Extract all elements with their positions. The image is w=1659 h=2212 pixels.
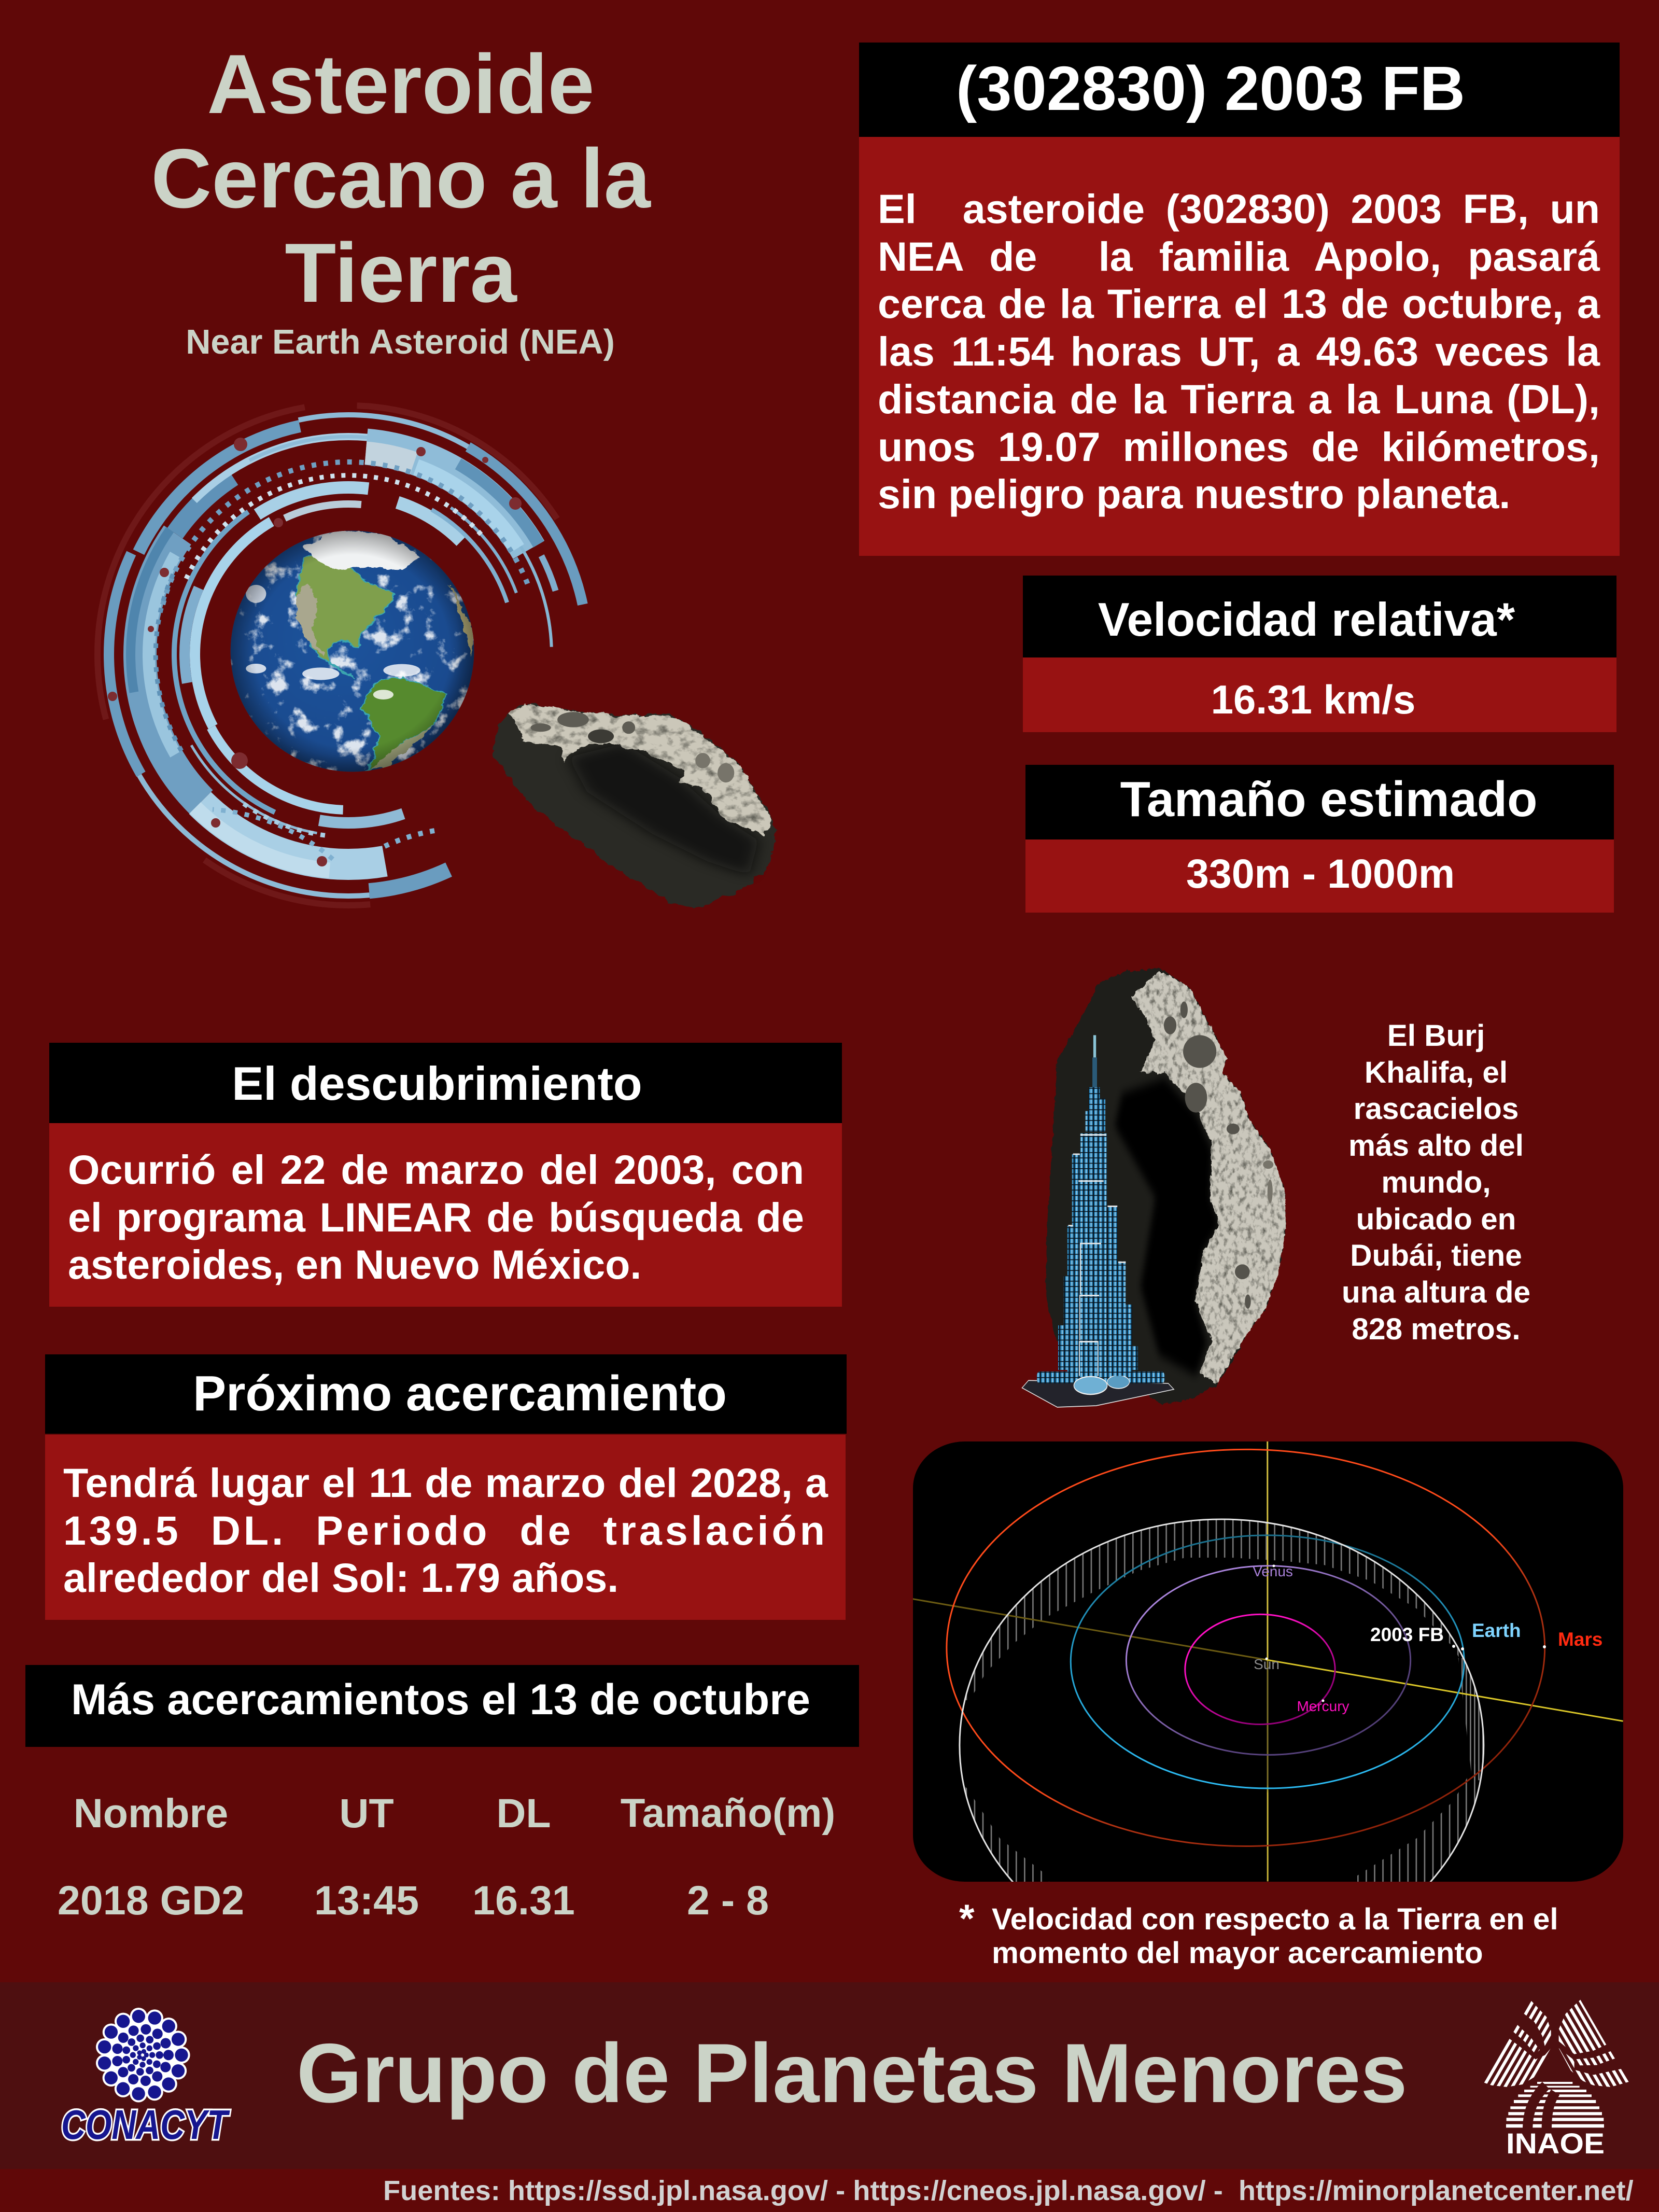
text: next approach: alrededor del Sol: 1.79 años. [63,1555,618,1601]
text: Burj Khalifa note: mundo, [1381,1166,1491,1199]
heading: next approach: Próximo acercamiento [193,1366,727,1421]
panel: description [859,137,1620,556]
icon: earth [231,530,474,772]
table: approaches: UT [339,1790,394,1836]
asteroid [492,703,777,908]
heading: group name: Grupo de Planetas Menores [297,2026,1408,2120]
text: next approach: 139.5 DL. Periodo de traslación [63,1507,828,1553]
heading: more approaches: Más acercamientos el 13 de octubre [71,1675,810,1724]
heading: asteroid name: (302830) 2003 FB [956,53,1465,123]
table: approaches: 2 - 8 [687,1877,769,1923]
panel: discovery [49,1123,842,1307]
orbit labels [1253,1563,1602,1714]
orbit labels: Mars [1558,1629,1602,1650]
illustration: earth with tech rings and asteroid [94,402,778,908]
footer band [0,1982,1659,2169]
text: discovery: asteroides, en Nuevo México. [68,1241,641,1287]
footnote: Velocidad con respecto a la Tierra en el momento del mayor acercamiento [992,1902,1558,1970]
table: approaches: DL [496,1790,551,1836]
tech rings [97,403,599,905]
header: asteroid name [859,43,1620,137]
chart: orbit diagram [913,1441,1623,1882]
text: next approach [63,1460,828,1601]
orbit labels: 2003 FB [1370,1624,1444,1645]
velocity value: 16.31 km/s [1211,677,1415,722]
title: Tierra [285,226,517,320]
orbit labels: Earth [1472,1620,1521,1641]
logo: INAOE [1484,1999,1629,2160]
table: approaches: 13:45 [314,1877,419,1923]
text: description: El asteroide (302830) 2003 FB, un [878,186,1600,232]
text: discovery: Ocurrió el 22 de marzo del 2003, con [68,1146,804,1193]
text: description: cerca de la Tierra el 13 de octubre, a [878,281,1600,327]
panel: next approach header [45,1354,847,1434]
panel: discovery header [49,1043,842,1123]
text: Burj Khalifa note: Khalifa, el [1365,1056,1508,1089]
title: Asteroide [207,37,595,131]
hatching [965,1520,1483,1882]
table: approaches: 16.31 [472,1877,575,1923]
panel: velocity header [1023,576,1616,657]
orbit labels: Mercury [1297,1698,1349,1714]
text: Burj Khalifa note [1342,1019,1530,1346]
text: description: distancia de la Tierra a la Luna (DL), [878,376,1600,422]
text: Burj Khalifa note: más alto del [1348,1129,1524,1163]
text: Burj Khalifa note: 828 metros. [1352,1312,1521,1346]
table: approaches: Nombre [74,1790,228,1836]
text: description: unos 19.07 millones de kilómetros, [878,424,1600,470]
table: approaches: 2018 GD2 [58,1877,244,1923]
panel: size value [1025,839,1614,913]
panel: size header [1025,765,1614,839]
text: description [878,186,1600,517]
table: approaches [58,1790,835,1923]
table: approaches: Tamaño(m) [621,1790,835,1836]
title: Cercano a la [151,132,651,226]
text: description: sin peligro para nuestro planeta. [878,471,1510,517]
big asteroid [1046,968,1286,1404]
heading: discovery: El descubrimiento [232,1057,642,1110]
text: description: NEA de la familia Apolo, pasará [878,233,1600,279]
title [151,37,651,320]
orbit labels: Venus [1253,1563,1293,1579]
heading: size: Tamaño estimado [1120,772,1537,827]
panel: more approaches header [25,1665,859,1747]
panel: velocity value [1023,657,1616,732]
heading: velocity: Velocidad relativa* [1098,594,1515,646]
orbit labels: Sun [1254,1656,1280,1672]
text: Burj Khalifa note: Dubái, tiene [1350,1239,1522,1272]
text: description: las 11:54 horas UT, a 49.63 veces la [878,328,1600,374]
footnote: * [959,1897,975,1941]
logo: INAOE: INAOE [1506,2127,1605,2160]
logo: CONACYT [61,2008,232,2148]
Burj Khalifa tower [1022,1035,1174,1407]
text: discovery [68,1146,804,1287]
text: Burj Khalifa note: rascacielos [1354,1092,1519,1126]
text: next approach: Tendrá lugar el 11 de marzo del 2028, a [63,1460,828,1506]
text: Burj Khalifa note: ubicado en [1356,1202,1516,1236]
text: discovery: el programa LINEAR de búsqueda de [68,1194,804,1240]
text: Burj Khalifa note: El Burj [1387,1019,1485,1053]
size value: 330m - 1000m [1186,850,1455,897]
illustration: asteroid compared with Burj Khalifa [1021,968,1286,1408]
text: Burj Khalifa note: una altura de [1342,1276,1530,1309]
subtitle: Near Earth Asteroid (NEA) [186,323,615,361]
panel: next approach [45,1435,846,1620]
ring holes [108,438,522,866]
sources: Fuentes: https://ssd.jpl.nasa.gov/ - https://cneos.jpl.nasa.gov/ - https://minorplanetcenter.net/ [383,2175,1634,2206]
